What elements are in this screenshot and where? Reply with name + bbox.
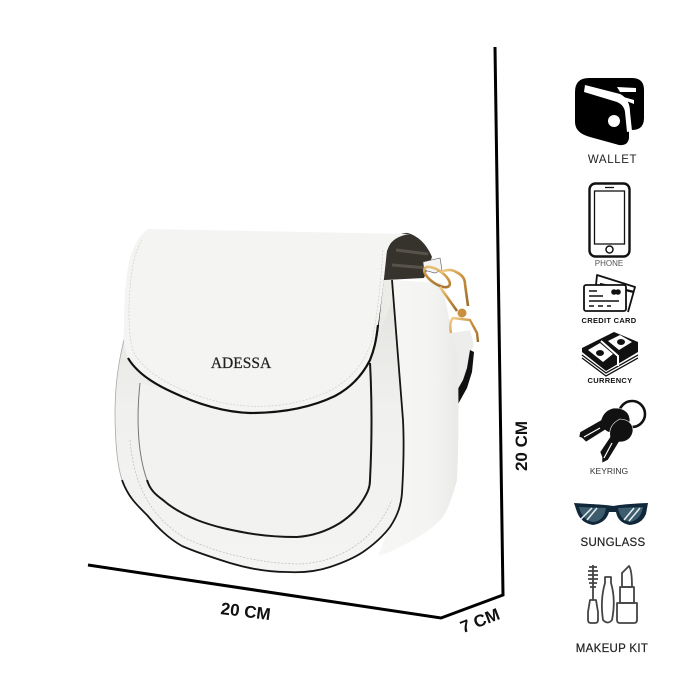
inner panel <box>138 363 372 537</box>
flap <box>124 229 410 413</box>
sunglass label: SUNGLASS <box>580 537 646 549</box>
icon: makeup kit <box>588 565 637 623</box>
inner panel edge <box>138 383 147 480</box>
icon: wallet <box>575 78 644 145</box>
strap behind bag <box>447 330 474 405</box>
phone label: PHONE <box>595 259 623 268</box>
makeup kit label: MAKEUP KIT <box>576 643 648 655</box>
strap tab <box>423 258 442 273</box>
label: depth 7 CM: 7 CM <box>458 605 502 637</box>
bag interior <box>382 233 432 280</box>
outer panel edge <box>122 280 404 572</box>
left thin edge <box>115 340 124 480</box>
flap stitching <box>129 240 383 406</box>
stitching <box>130 440 392 564</box>
mascara <box>588 565 598 623</box>
label: height 20 CM: 20 CM <box>512 421 531 471</box>
flap edge <box>128 325 378 413</box>
tube <box>602 577 614 622</box>
currency label: CURRENCY <box>588 376 632 385</box>
dimension lines <box>88 47 503 618</box>
gusset <box>330 280 403 567</box>
outer front panel <box>115 300 404 572</box>
icon: keyring <box>579 401 645 463</box>
gold clasp <box>421 263 478 342</box>
credit card label: CREDIT CARD <box>582 316 637 325</box>
inner panel dark edge <box>147 363 372 537</box>
handbag <box>115 229 478 572</box>
side panel <box>378 280 458 556</box>
icon: phone <box>590 184 630 256</box>
brand name: ADESSA <box>211 355 272 372</box>
label: width 20 CM: 20 CM <box>220 599 272 624</box>
keyring label: KEYRING <box>590 466 628 476</box>
gusset left edge <box>377 280 383 335</box>
lipstick <box>617 566 637 623</box>
icon: credit card <box>584 275 635 312</box>
icon: sunglasses <box>574 503 648 525</box>
wallet label: WALLET <box>588 154 637 166</box>
icon: currency <box>582 332 638 376</box>
